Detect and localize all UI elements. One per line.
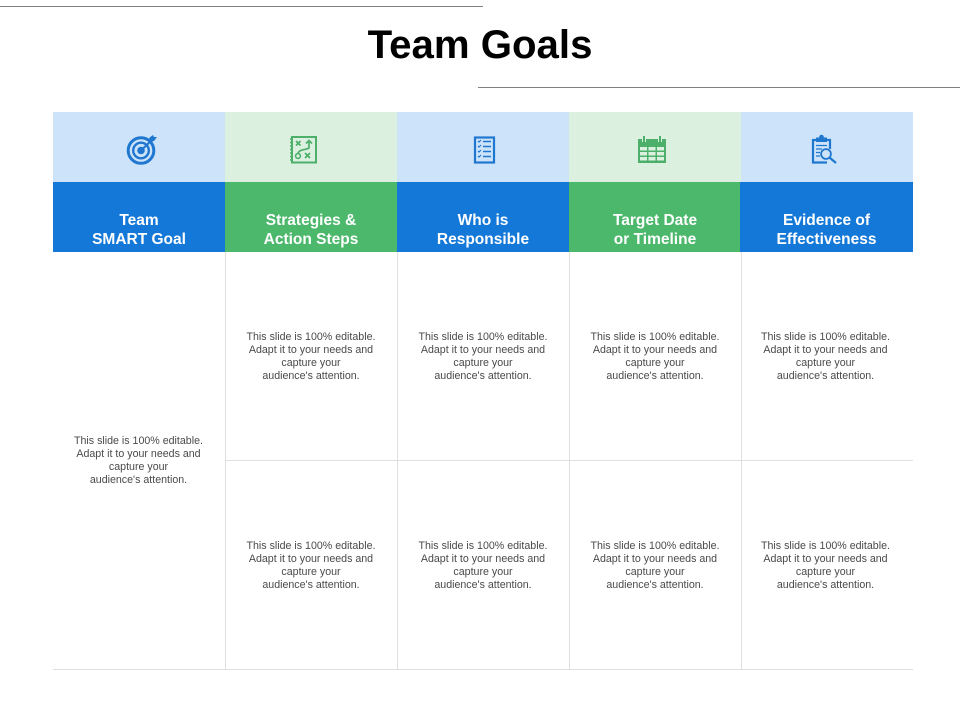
text: team goal cell: capture your [109,461,168,473]
header: Evidence of Effectiveness [740,182,913,252]
text: timeline row 1: capture your [625,357,685,369]
text: strategies row 1: Adapt it to your needs and [249,344,373,356]
icon panel: target [53,112,225,182]
top decorative rule [0,6,483,7]
text: evidence row 2: capture your [796,566,855,578]
text: responsible row 1: Adapt it to your needs and [421,344,545,356]
text: evidence row 1: Adapt it to your needs and [763,344,888,356]
text: timeline row 2: Adapt it to your needs and [593,553,717,565]
title: Team Goals [368,22,592,67]
text: strategies row 2: Adapt it to your needs and [249,553,373,565]
text: responsible row 2: capture your [453,566,513,578]
header: Who is Responsible: Who is [458,212,508,229]
text: strategies row 1: This slide is 100% editable. [247,331,375,343]
text: timeline row 2: audience's attention. [606,579,704,591]
icon panel: strategy board [225,112,397,182]
text: timeline row 2: capture your [625,566,685,578]
text: responsible row 1: capture your [453,357,513,369]
bottom decorative rule [478,87,960,88]
header: Team SMART Goal: SMART Goal [92,231,186,248]
text: team goal cell: audience's attention. [90,474,187,486]
icon panel: calendar [569,112,741,182]
text: evidence row 2: audience's attention. [777,579,874,591]
text: evidence row 1: audience's attention. [777,370,874,382]
text: strategies row 2: This slide is 100% editable. [247,540,375,552]
text: responsible row 2: Adapt it to your needs and [421,553,545,565]
text: strategies row 1: capture your [281,357,341,369]
text: strategies row 2: capture your [281,566,341,578]
header: Team SMART Goal: Team [119,212,159,229]
text: evidence row 1: capture your [796,357,855,369]
text: responsible row 1 [418,331,547,382]
text: timeline row 1: Adapt it to your needs and [593,344,717,356]
header: Strategies & Action Steps: Strategies & [266,212,356,229]
header: Target Date or Timeline: or Timeline [614,231,696,248]
header: Evidence of Effectiveness: Effectiveness [777,231,876,248]
header: Who is Responsible: Responsible [437,231,529,248]
text: timeline row 1: This slide is 100% editable. [591,331,719,343]
header: Team SMART Goal [53,182,225,252]
header: Strategies & Action Steps [225,182,397,252]
text: responsible row 2 [418,540,547,591]
text: responsible row 1: audience's attention. [434,370,532,382]
header: Strategies & Action Steps: Action Steps [264,231,358,248]
text: evidence row 1 [761,331,890,382]
icon panel: clipboard with magnifier [741,112,913,182]
text: strategies row 1: audience's attention. [262,370,360,382]
text: team goal cell: This slide is 100% editable. [74,435,203,447]
header: Target Date or Timeline: Target Date [613,212,697,229]
text: strategies row 2 [246,540,375,591]
text: responsible row 2: audience's attention. [434,579,532,591]
text: evidence row 2 [761,540,890,591]
text: timeline row 2: This slide is 100% editable. [591,540,719,552]
text: team goal cell [74,435,203,486]
text: timeline row 1: audience's attention. [606,370,704,382]
header: Evidence of Effectiveness: Evidence of [783,212,870,229]
text: responsible row 2: This slide is 100% editable. [419,540,547,552]
text: team goal cell: Adapt it to your needs and [76,448,201,460]
text: evidence row 2: This slide is 100% editable. [761,540,890,552]
icon panel: checklist [397,112,569,182]
header: Who is Responsible [397,182,569,252]
text: strategies row 1 [246,331,375,382]
text: timeline row 2 [590,540,719,591]
header: Target Date or Timeline [569,182,741,252]
text: evidence row 2: Adapt it to your needs and [763,553,888,565]
text: strategies row 2: audience's attention. [262,579,360,591]
text: responsible row 1: This slide is 100% editable. [419,331,547,343]
text: timeline row 1 [590,331,719,382]
text: evidence row 1: This slide is 100% editable. [761,331,890,343]
